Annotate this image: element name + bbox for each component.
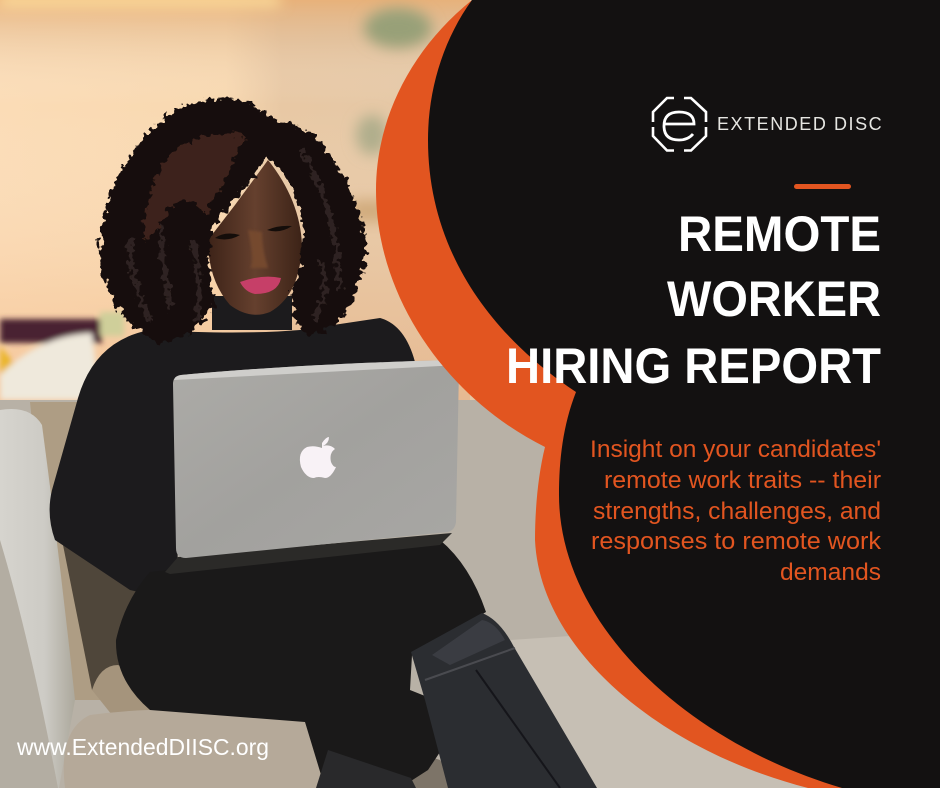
laptop: [165, 360, 459, 574]
title: REMOTE: [678, 206, 881, 262]
title: WORKER: [667, 271, 881, 327]
logo: [653, 98, 883, 150]
subtitle: demands: [780, 559, 881, 586]
subtitle: remote work traits -- their: [604, 467, 881, 494]
turtleneck and torso: [50, 296, 415, 598]
title: [506, 206, 881, 394]
legs: [116, 540, 486, 788]
icon: octagon e mark: [653, 98, 706, 150]
icon: apple logo: [300, 437, 336, 478]
face: [208, 160, 302, 315]
subtitle: [590, 436, 882, 586]
sofa: [0, 400, 940, 788]
black curved panel: [428, 0, 940, 788]
title: HIRING REPORT: [506, 338, 881, 394]
subtitle: responses to remote work: [591, 528, 882, 555]
subtitle: Insight on your candidates': [590, 436, 881, 463]
subtitle: strengths, challenges, and: [593, 498, 881, 525]
hair: [100, 98, 366, 342]
boots: [316, 613, 597, 788]
brand name: EXTENDED DISC: [717, 114, 883, 134]
accent bar: [794, 184, 851, 189]
website url: www.ExtendedDIISC.org: [16, 734, 269, 760]
orange curved shape: [376, 0, 940, 788]
